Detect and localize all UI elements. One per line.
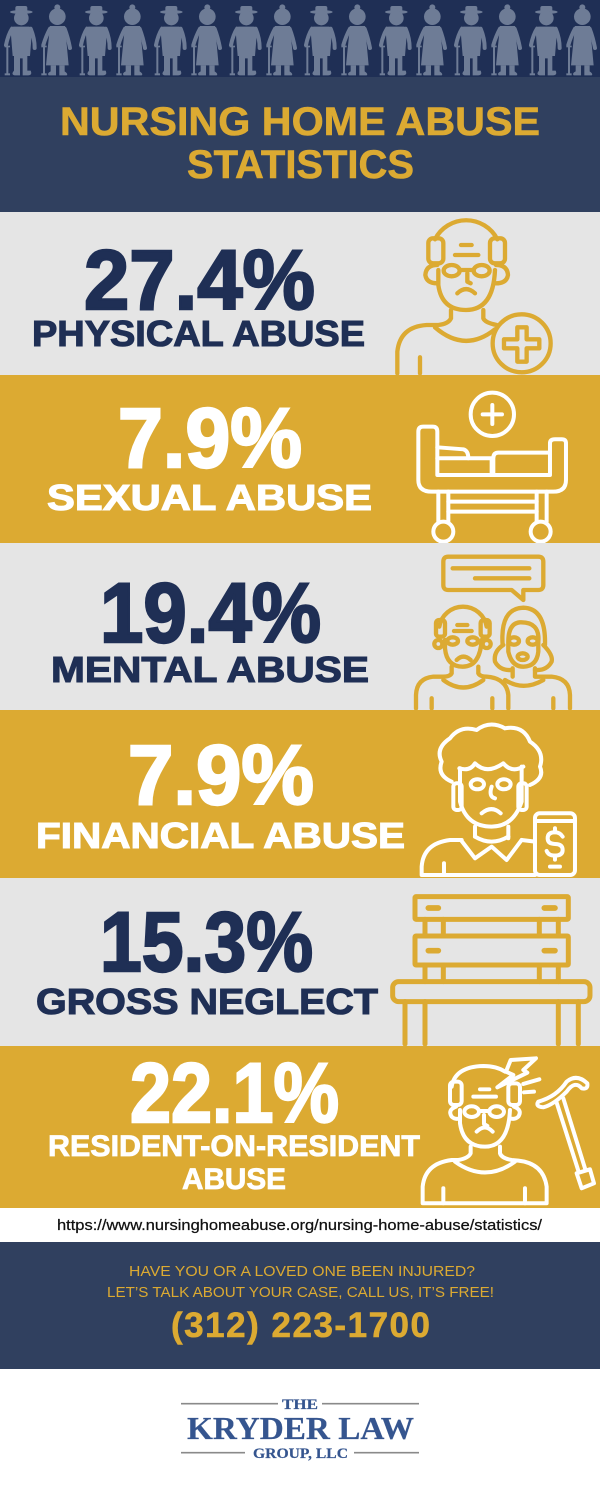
panel: resident-on-resident abuse: [0, 1046, 600, 1208]
call to action text: [107, 1263, 494, 1301]
panel: physical abuse: [0, 212, 600, 375]
panel: mental abuse: [0, 543, 600, 710]
stat: 15.3%: 15.3%: [100, 895, 313, 989]
stat: 7.9%: 7.9%: [118, 391, 302, 485]
icon: empty bench: [393, 897, 590, 1044]
title: NURSING HOME ABUSE: [60, 100, 540, 144]
panel: sexual abuse: [0, 375, 600, 543]
label: mental abuse: MENTAL ABUSE: [51, 649, 369, 690]
top banner of elderly silhouettes: [0, 0, 600, 77]
icon: hospital bed: [418, 393, 566, 542]
icon: elderly woman with phone and dollar sign: [422, 725, 575, 875]
panel: financial abuse: [0, 710, 600, 878]
stat: 19.4%: 19.4%: [100, 566, 321, 660]
label: resident-on-resident abuse: ABUSE: [182, 1163, 286, 1196]
label: gross neglect: GROSS NEGLECT: [36, 981, 378, 1022]
logo: The Kryder Law Group, LLC: [181, 1397, 419, 1462]
logo: The Kryder Law Group, LLC: GROUP, LLC: [253, 1446, 348, 1462]
logo: The Kryder Law Group, LLC: KRYDER LAW: [187, 1410, 414, 1446]
icon: elderly man with lightning bolt and cane: [423, 1058, 594, 1203]
label: sexual abuse: SEXUAL ABUSE: [47, 477, 372, 518]
stat: 22.1%: 22.1%: [130, 1046, 339, 1140]
title: STATISTICS: [187, 143, 414, 187]
label: resident-on-resident abuse: RESIDENT-ON-RESIDENT: [48, 1130, 420, 1163]
label: resident-on-resident abuse: [48, 1130, 420, 1196]
stat: 27.4%: 27.4%: [84, 233, 315, 327]
title: [60, 100, 540, 187]
phone number: (312) 223-1700: [171, 1306, 430, 1345]
icon: elderly couple with speech bubble: [416, 557, 570, 708]
panel: gross neglect: [0, 878, 600, 1046]
panel: call to action: [0, 1242, 600, 1369]
source url: https://www.nursinghomeabuse.org/nursing-home-abuse/statistics/: [57, 1217, 543, 1234]
label: physical abuse: PHYSICAL ABUSE: [32, 313, 365, 354]
label: financial abuse: FINANCIAL ABUSE: [36, 815, 405, 856]
logo: The Kryder Law Group, LLC: THE: [282, 1397, 318, 1413]
title panel: [0, 77, 600, 212]
call to action text: HAVE YOU OR A LOVED ONE BEEN INJURED?: [129, 1263, 475, 1280]
stat: 7.9%: 7.9%: [128, 728, 314, 822]
call to action text: LET’S TALK ABOUT YOUR CASE, CALL US, IT’S FREE!: [107, 1284, 494, 1301]
icon: elderly man with medical cross: [397, 220, 551, 373]
